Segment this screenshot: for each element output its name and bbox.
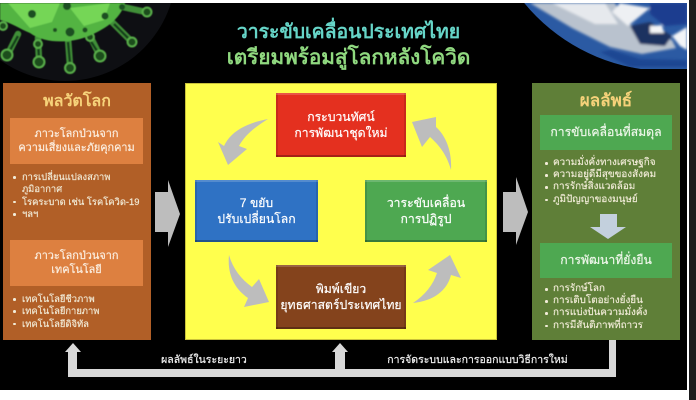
box: balanced drive: การขับเคลื่อนที่สมดุล [550,125,662,139]
list: balance outcomes: ภูมิปัญญาของมนุษย์ [553,194,638,205]
box: technology: ภาวะโลกป่วนจาก [35,250,118,262]
title line 2: เตรียมพร้อมสู่โลกหลังโควิด [227,46,470,69]
list: technologies: เทคโนโลยีดิจิทัล [22,318,89,329]
box: new development paradigm: การพัฒนาชุดใหม่ [294,126,388,140]
box: reform agenda [365,180,487,242]
arrow: into centre panel [155,180,180,247]
box: sustainable development: การพัฒนาที่ยั่งยืน [560,253,652,267]
arrow: bottom left [229,255,269,307]
box: seven drivers: ปรับเปลี่ยนโลก [217,212,296,226]
title [227,18,470,70]
box: national strategy blueprint: พิมพ์เขียว [316,282,366,296]
arrow: into results panel [503,177,528,245]
box: sustainable development [540,243,672,278]
panel heading: ผลลัพธ์ [580,91,632,110]
list: risks: ฯลฯ [22,208,38,219]
list: risks: ภูมิอากาศ [22,183,62,194]
panel heading: พลวัตโลก [43,93,111,110]
list: technologies [13,293,99,329]
list: balance outcomes: ความอยู่ดีมีสุขของสังคม [553,169,656,180]
list: technologies: เทคโนโลยีชีวภาพ [22,293,95,304]
label: new system design: การจัดระบบและการออกแบบวิธีการใหม่ [387,354,568,366]
box: reform agenda: วาระขับเคลื่อน [387,196,465,210]
box: reform agenda: การปฏิรูป [400,212,451,226]
list: sustainability outcomes: การเติบโตอย่างยั่งยืน [553,295,643,306]
box: new development paradigm: กระบวนทัศน์ [307,110,375,124]
box: seven drivers: 7 ขยับ [240,196,273,210]
box: risks and threats: ภาวะโลกป่วนจาก [35,128,118,140]
box: national strategy blueprint: ยุทธศาสตร์ประเทศไทย [280,298,402,312]
arrow: top left [218,119,268,165]
list: sustainability outcomes: การมีสันติภาพที่ถาวร [553,320,643,331]
box: seven drivers [195,180,318,242]
arrow: down [590,214,626,239]
arrow: bottom right [413,255,461,303]
list: sustainability outcomes: การแบ่งปันความมั่งคั่ง [553,307,647,318]
list: balance outcomes [545,154,656,205]
panel: results [532,83,680,340]
box: new development paradigm [276,93,406,157]
box: balanced drive [540,115,672,150]
box: technology [10,240,143,286]
arrow: top right [412,117,451,170]
label: long-term results: ผลลัพธ์ในระยะยาว [161,354,247,366]
list: balance outcomes: การรักษ์สิ่งแวดล้อม [553,181,635,192]
title line 1: วาระขับเคลื่อนประเทศไทย [237,21,460,43]
list: risks [13,170,140,219]
list: sustainability outcomes: การรักษ์โลก [553,283,605,294]
image: earth [524,3,687,69]
list: risks: การเปลี่ยนแปลงสภาพ [22,171,110,182]
panel: global turbulence [3,83,151,340]
box: risks and threats: ความเสี่ยงและภัยคุกคาม [18,142,135,154]
cycle arrows [218,117,461,307]
feedback arrows [65,340,616,377]
box: risks and threats [10,118,143,164]
list: risks: โรคระบาด เช่น โรคโควิด-19 [22,196,139,207]
list: technologies: เทคโนโลยีกายภาพ [22,305,99,316]
panel: yellow cycle [185,83,497,340]
image: coronavirus [0,3,171,81]
list: balance outcomes: ความมั่งคั่งทางเศรษฐกิจ [553,157,656,168]
box: technology: เทคโนโลยี [51,264,102,276]
dark window edge [689,0,696,400]
list: sustainability outcomes [545,282,647,331]
box: national strategy blueprint [276,265,406,329]
